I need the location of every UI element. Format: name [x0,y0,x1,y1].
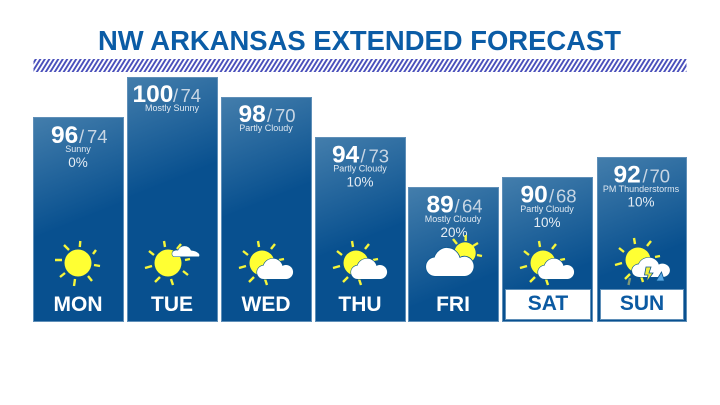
temperature high and low: 68 [556,186,577,207]
precipitation chance: 0% [68,155,88,170]
panel: Thursday [316,138,406,322]
temperature high and low: / [642,166,648,187]
temperature high and low: 94 [332,142,360,169]
temperature high and low: 98 [238,101,266,128]
precipitation chance: 10% [533,215,561,230]
condition: Partly Cloudy [333,164,387,174]
temperature high and low: 100 [132,81,173,108]
condition: Sunny [65,144,91,154]
day label: THU [338,293,382,316]
icon: sun [55,241,100,286]
hatched divider band [34,59,686,72]
icon: partly cloudy [333,241,387,285]
condition: Mostly Sunny [145,103,200,113]
panel: Saturday [502,178,592,322]
day label box [506,290,590,320]
precipitation chance: 10% [627,195,655,210]
temperature high and low: / [360,146,366,167]
icon: mostly cloudy [426,235,482,276]
condition: PM Thunderstorms [603,184,680,194]
icon: partly cloudy [239,241,293,285]
panel: Monday [34,118,124,322]
temperature high and low: 92 [614,162,641,189]
precipitation chance: 10% [346,175,374,190]
temperature high and low: / [267,105,273,126]
temperature high and low: 73 [368,146,389,167]
day label box [600,290,684,320]
panel: Tuesday [128,78,218,322]
temperature high and low: 64 [462,196,483,217]
temperature high and low: / [549,186,555,207]
temperature high and low: 70 [650,166,670,187]
day label: SAT [528,292,568,315]
temperature high and low: / [79,126,85,147]
precipitation chance: 20% [440,225,468,240]
temperature high and low: 89 [426,192,454,219]
condition: Partly Cloudy [520,204,574,214]
temperature high and low: / [454,196,460,217]
day label: WED [242,293,290,316]
temperature high and low: 70 [275,105,296,126]
icon: partly cloudy [520,241,574,285]
temperature high and low: 90 [520,182,548,209]
icon: mostly sunny [145,241,199,285]
panel: Friday [408,188,498,322]
temperature high and low: 74 [180,85,201,106]
icon: thunderstorm [615,238,670,285]
day label: SUN [620,292,664,315]
title: NW ARKANSAS EXTENDED FORECAST [98,25,621,56]
condition: Mostly Cloudy [425,214,482,224]
temperature high and low: 96 [51,122,78,149]
temperature high and low: / [173,85,179,106]
temperature high and low: 74 [87,126,108,147]
panel: Wednesday [222,98,312,322]
day label: FRI [436,293,470,316]
day label: TUE [151,293,193,316]
condition: Partly Cloudy [239,123,293,133]
panel: Sunday [598,158,686,322]
day label: MON [54,293,102,316]
